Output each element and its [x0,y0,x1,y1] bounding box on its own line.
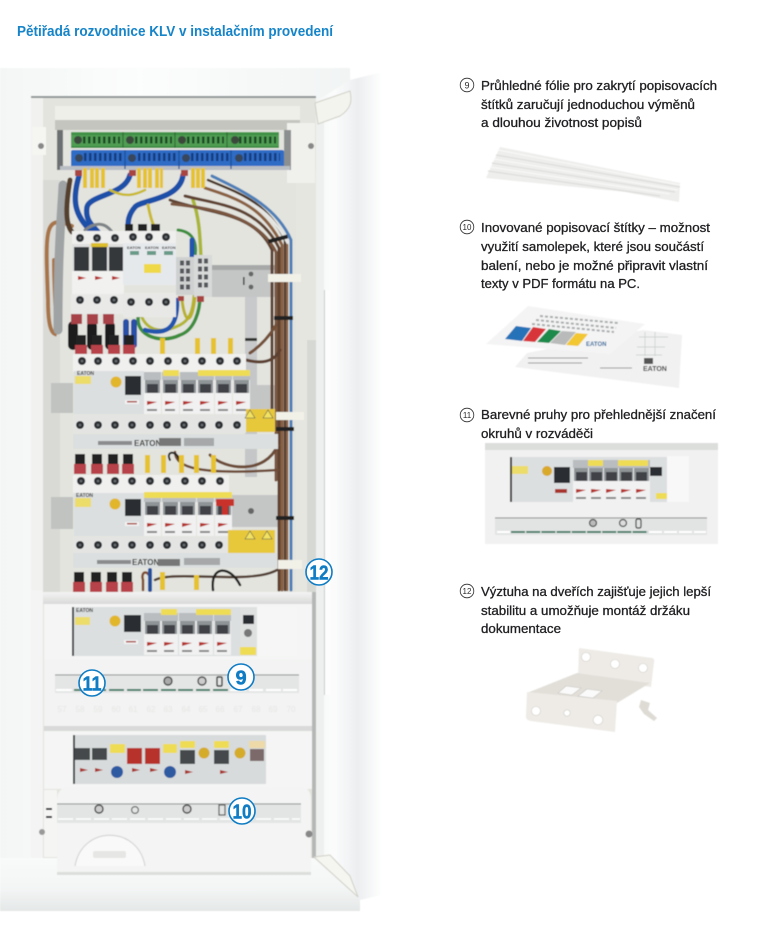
blue N bar [60,150,290,170]
image: label sheets: EATON [643,366,667,373]
item 11 text: Barevné pruhy pro přehlednější značení [481,407,716,422]
row 2 protection devices: EATON [76,493,93,499]
badge 11 [79,670,105,696]
image: label sheets [486,306,682,388]
faint circuit numbers: 62 [147,705,156,714]
faint circuit numbers: 63 [164,705,173,714]
faint circuit numbers: 68 [252,705,261,714]
item 9 text: a dlouhou životnost popisů [481,115,642,130]
main switch and surge protector: EATON [145,245,159,250]
faint circuit numbers: 60 [112,705,121,714]
row 1 label strip [73,434,278,449]
faint circuit numbers: 59 [94,705,103,714]
faint circuit numbers: 61 [129,705,138,714]
row 4 devices [44,731,312,789]
row 1 label strip: EATON [134,439,161,448]
faint circuit numbers: 69 [269,705,278,714]
item 10 text: 10 [463,223,472,232]
item 12 text: 12 [463,587,472,596]
item 12 text: Výztuha na dveřích zajišťuje jejich lepší [481,584,711,599]
row 3 devices: EATON [76,608,93,614]
faint circuit numbers: 65 [199,705,208,714]
badge 11: 11 [82,674,102,696]
cover panel top [31,590,316,858]
row 3 clips [73,572,133,592]
cover panel with label strip [44,660,312,731]
item 10 text [460,220,710,291]
din rail [51,265,279,529]
main switch and surge protector: EATON [162,245,176,250]
image: label sheets: EATON [586,342,606,348]
main switch and surge protector [71,224,176,317]
faint circuit numbers: 67 [234,705,243,714]
interior background [31,96,316,858]
row 1 protection devices: EATON [77,371,94,377]
door [313,72,382,900]
bottom cover with label strip and handle [39,787,312,875]
faint circuit numbers: 57 [58,705,67,714]
item 12 text: stabilitu a umožňuje montáž držáku [481,603,690,618]
door hinges [314,91,358,897]
upper red clips [71,314,114,324]
faint circuit numbers: 66 [216,705,225,714]
row 2 label strip [73,553,277,568]
cabinet frame [0,68,350,911]
item 11 text [460,407,716,441]
left and right brackets [32,123,315,183]
wiring top [47,175,291,590]
image: door reinforcement bracket [526,648,657,732]
row 2 protection devices [73,454,275,553]
faint circuit numbers: 70 [287,705,296,714]
item 9 text [460,78,717,130]
yellow ferrules [83,168,233,590]
item 9 text: Průhledné fólie pro zakrytí popisovacích [481,78,717,93]
item 9 text: 9 [464,80,470,90]
photo: KLV distribution board [0,68,382,911]
item 11 text: okruhů v rozváděči [481,426,593,441]
item 9 text: štítků zaručují jednoduchou výměnů [481,97,695,112]
item 12 text [460,584,711,636]
title: Pětiřadá rozvodnice KLV v instalačním provedení [17,23,334,40]
door reinforcement bar [316,102,331,857]
main switch and surge protector: EATON [127,245,141,250]
faint circuit numbers: 58 [76,705,85,714]
item 10 text: využití samolepek, které jsou součástí [481,239,704,254]
terminal block [176,255,212,302]
item 12 text: dokumentace [481,621,561,636]
item 10 text: Inovované popisovací štítky – možnost [481,220,710,235]
item 11 text: 11 [463,411,472,420]
row 3 devices [72,607,297,656]
item 10 text: texty v PDF formátu na PC. [481,276,640,291]
green PE bar [71,132,279,148]
image: coloured strips photo [485,443,718,544]
badge 12: 12 [310,562,328,584]
badge 10: 10 [232,802,252,824]
badge 9 [228,664,254,690]
cable ties [268,234,304,569]
badge 9: 9 [235,668,247,690]
image: transparent foils [486,147,680,202]
row 1 protection devices [73,335,275,433]
frame bottom band [0,858,360,911]
faint circuit numbers: 64 [182,705,191,714]
row 2 label strip: EATON [132,558,159,567]
faint circuit numbers [58,705,296,714]
item 10 text: balení, nebo je možné připravit vlastní [481,258,708,273]
